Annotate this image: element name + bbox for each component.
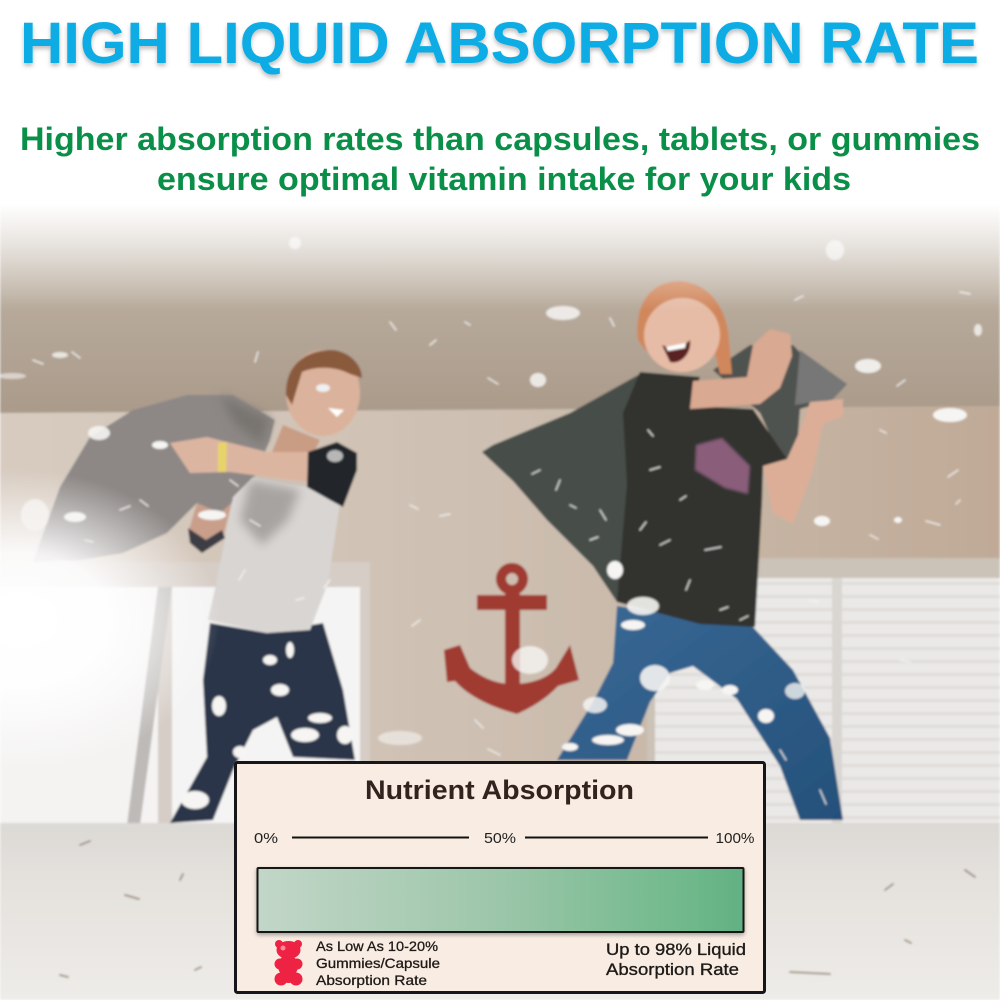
- subtitle: [20, 121, 980, 197]
- shirt print: [695, 438, 750, 494]
- girl mouth: [662, 340, 690, 362]
- window: right blinds: [647, 558, 1000, 828]
- bed debris specks: [60, 841, 975, 977]
- bed: [0, 823, 1000, 1000]
- anchor: [444, 563, 579, 714]
- low absorption label: [316, 938, 440, 988]
- title: HIGH LIQUID ABSORPTION RATE: [20, 11, 979, 76]
- high absorption label: [606, 940, 746, 979]
- window: left bright: [0, 562, 370, 828]
- boy shirt: [208, 477, 340, 633]
- boy trousers: [170, 623, 355, 823]
- scale: 50%: [484, 830, 516, 847]
- feathers large: [0, 237, 982, 809]
- high absorption label: Absorption Rate: [606, 960, 739, 979]
- girl hair: [637, 281, 732, 374]
- subtitle: ensure optimal vitamin intake for your kids: [157, 161, 851, 197]
- girl head: [637, 291, 727, 379]
- scale: 100%: [716, 830, 754, 847]
- girl held pillow: [713, 345, 847, 463]
- scale: 0%: [254, 830, 278, 847]
- absorption gradient bar: [258, 868, 744, 932]
- girl upper arm: [690, 329, 792, 409]
- panel heading: Nutrient Absorption: [365, 775, 634, 805]
- girl pillow: [482, 374, 640, 602]
- girl lower arm: [763, 399, 843, 524]
- boy far arm: [188, 497, 233, 552]
- boy near arm: [170, 437, 315, 483]
- bright light glare: [0, 470, 220, 770]
- top white fade: [0, 185, 1000, 310]
- scale: [254, 830, 754, 847]
- feathers streaks: [33, 292, 970, 804]
- boy: [33, 350, 362, 823]
- bracelet: [218, 442, 227, 472]
- boy sleeve: [307, 442, 357, 507]
- low absorption label: Gummies/Capsule: [316, 955, 440, 971]
- girl jeans: [557, 606, 843, 820]
- boy head: [286, 350, 360, 436]
- subtitle: Higher absorption rates than capsules, tablets, or gummies: [20, 121, 980, 157]
- boy neck: [272, 425, 320, 456]
- boy pillow: [33, 395, 275, 562]
- low absorption label: Absorption Rate: [316, 972, 427, 988]
- high absorption label: Up to 98% Liquid: [606, 940, 746, 959]
- panel: nutrient absorption: [236, 762, 764, 992]
- icon: red gummy bear: [274, 940, 302, 986]
- girl: [482, 281, 847, 820]
- low absorption label: As Low As 10-20%: [316, 938, 438, 954]
- girl shirt: [617, 372, 787, 627]
